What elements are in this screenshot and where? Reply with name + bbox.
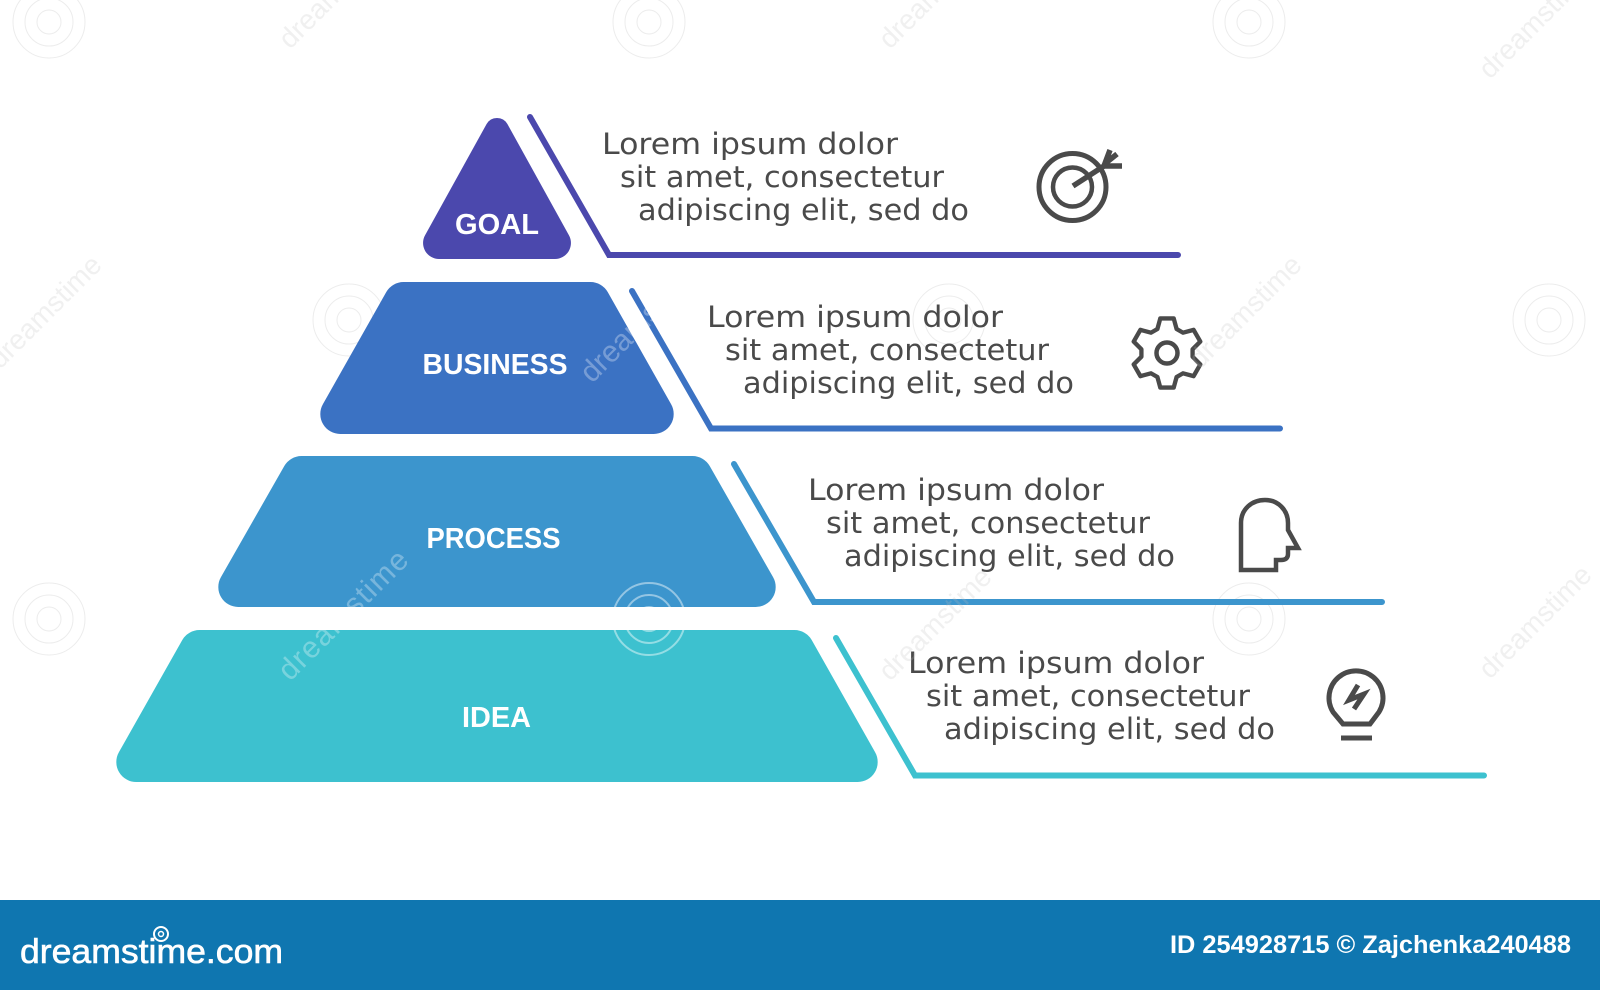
text block: idea: sit amet, consectetur: [926, 679, 1250, 713]
footer logo: dreamstime.com: [20, 933, 283, 971]
pyramid shape: idea: [116, 630, 878, 782]
label: business: BUSINESS: [422, 349, 568, 381]
text: dreams: [574, 295, 668, 389]
pyramid shape: process: [218, 456, 776, 607]
text block: business: Lorem ipsum dolor: [707, 300, 1003, 334]
text block: goal: Lorem ipsum dolor: [602, 127, 898, 161]
pyramid shape: goal: [423, 118, 571, 259]
text block: goal: adipiscing elit, sed do: [638, 193, 969, 227]
connector line: business: [632, 291, 1280, 428]
label: goal: GOAL: [455, 209, 539, 241]
text block: business: sit amet, consectetur: [725, 333, 1049, 367]
text: dreamstime: [1182, 249, 1308, 374]
label: idea: IDEA: [462, 702, 531, 734]
icon: light bulb: [1329, 671, 1383, 738]
text: dreamstime: [272, 543, 415, 687]
text block: idea: Lorem ipsum dolor: [908, 646, 1204, 680]
icon: gear: [1134, 318, 1200, 388]
tier: process: [218, 456, 1382, 607]
pyramid shape: business: [320, 282, 674, 434]
connector line: idea: [836, 638, 1484, 776]
footer bar: [0, 900, 1600, 990]
label: process: PROCESS: [426, 523, 560, 555]
text block: process: Lorem ipsum dolor: [808, 473, 1104, 507]
text block: business: adipiscing elit, sed do: [743, 366, 1074, 400]
tier: idea: [116, 630, 1484, 782]
image credit: ID 254928715 © Zajchenka240488: [1170, 931, 1571, 959]
connector line: goal: [530, 117, 1178, 255]
text block: goal: sit amet, consectetur: [620, 160, 944, 194]
connector line: process: [734, 464, 1382, 602]
text block: idea: adipiscing elit, sed do: [944, 712, 1275, 746]
tier: business: [320, 282, 1280, 434]
tier: goal: [423, 117, 1178, 259]
text: dreamstime: [1472, 559, 1598, 684]
text: dreamstime: [872, 561, 998, 686]
text block: process: sit amet, consectetur: [826, 506, 1150, 540]
icon: head: [1241, 500, 1298, 570]
text block: process: adipiscing elit, sed do: [844, 539, 1175, 573]
icon: target with arrow: [1039, 150, 1122, 220]
